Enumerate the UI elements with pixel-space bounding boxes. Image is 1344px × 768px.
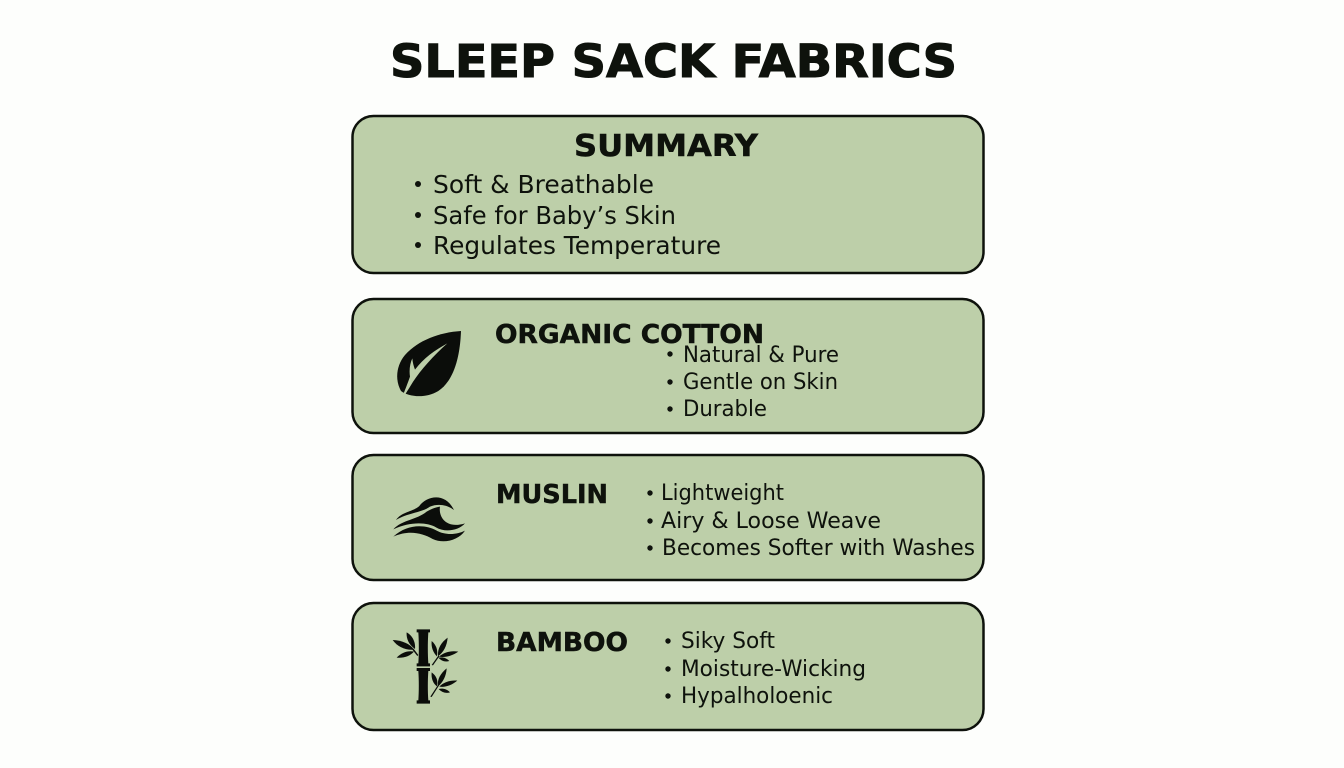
icon: leaf xyxy=(397,331,461,403)
organic cotton list xyxy=(667,343,839,422)
heading: bamboo: BAMBOO xyxy=(496,628,628,658)
summary list: Regulates Temperature xyxy=(433,231,721,260)
heading: summary: SUMMARY xyxy=(574,129,759,164)
panel: bamboo xyxy=(352,603,984,730)
heading: muslin: MUSLIN xyxy=(496,480,608,510)
organic cotton list: Gentle on Skin xyxy=(683,370,838,395)
panel: muslin xyxy=(352,455,984,580)
bamboo list: Hypalholoenic xyxy=(681,684,833,709)
bamboo list: Moisture-Wicking xyxy=(681,657,866,682)
muslin list: Lightweight xyxy=(661,481,784,506)
organic cotton list: Durable xyxy=(683,397,767,422)
heading: organic cotton: ORGANIC COTTON xyxy=(495,320,764,350)
organic cotton list: Natural & Pure xyxy=(683,343,839,368)
muslin list: Airy & Loose Weave xyxy=(661,509,881,534)
bamboo list: Siky Soft xyxy=(681,629,775,654)
panel: summary xyxy=(352,116,984,273)
icon: wave xyxy=(393,497,465,541)
summary list: Safe for Baby’s Skin xyxy=(433,201,676,230)
summary list: Soft & Breathable xyxy=(433,170,654,199)
muslin list xyxy=(647,481,975,561)
muslin list: Becomes Softer with Washes xyxy=(662,536,975,561)
panel: organic cotton xyxy=(352,299,984,433)
icon: bamboo xyxy=(393,629,458,704)
title: SLEEP SACK FABRICS xyxy=(390,35,957,88)
summary list xyxy=(415,170,721,260)
bamboo list xyxy=(665,629,866,709)
